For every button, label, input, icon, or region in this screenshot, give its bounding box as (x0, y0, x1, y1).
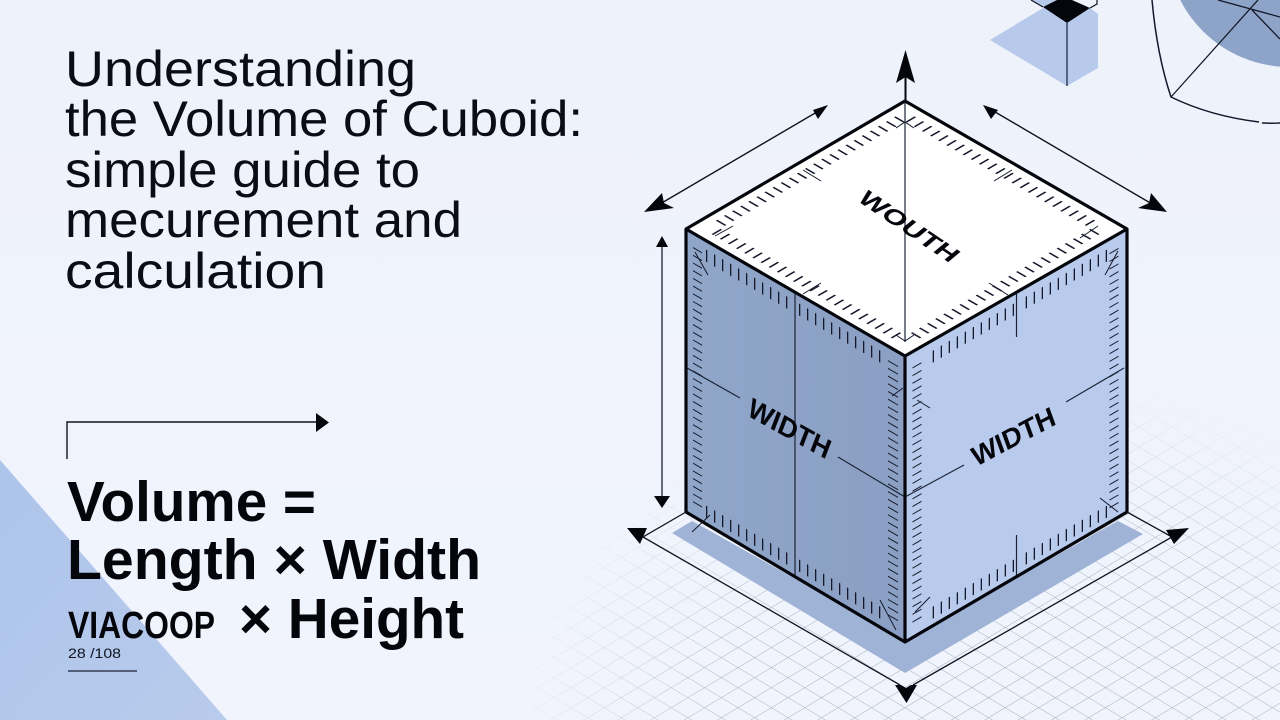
arrow: top left edge dimension (644, 105, 828, 212)
right face ruler ticks (917, 251, 1114, 623)
title: calculation (65, 243, 326, 299)
caption underline (68, 670, 137, 672)
label: top face: WOUTH (852, 187, 966, 267)
right face (905, 229, 1127, 642)
arrow: top right edge dimension (983, 105, 1167, 212)
decorative triangle: bottom left (0, 460, 227, 720)
arrow: bottom point (895, 685, 917, 703)
top face (686, 101, 1127, 356)
title: mecurement and (65, 192, 462, 248)
title (65, 41, 583, 299)
title: simple guide to (65, 142, 420, 198)
isometric floor grid (532, 408, 1280, 720)
formula (67, 470, 481, 651)
cube shadow (672, 521, 1143, 673)
cube outline (686, 101, 1127, 642)
formula: Volume = (67, 470, 316, 534)
arrow: elbow pointing right (67, 413, 329, 459)
decorative sphere wireframe: top right (1152, 0, 1280, 123)
arrow: bottom right dimension (913, 512, 1189, 685)
arrow: bottom left dimension (627, 512, 900, 685)
left face ruler ticks (698, 250, 893, 621)
decorative small cube: top (990, 0, 1098, 86)
title: Understanding (65, 41, 416, 97)
title: the Volume of Cuboid: (65, 91, 583, 147)
left face (686, 229, 905, 642)
arrow: left height dimension (654, 236, 670, 508)
formula: × Height (239, 587, 464, 651)
corner and major tick marks (692, 122, 1118, 630)
formula: VIACOOP (68, 605, 215, 647)
cube (686, 101, 1127, 642)
label: right face width: WIDTH (967, 400, 1059, 473)
formula: Length × Width (67, 528, 481, 592)
label: left face width: WIDTH (744, 392, 835, 465)
face centre lines (687, 101, 1124, 576)
top face ruler ticks (711, 116, 1100, 341)
arrow: vertical height axis (896, 50, 915, 101)
small caption under formula: 28 /108 (68, 645, 121, 661)
